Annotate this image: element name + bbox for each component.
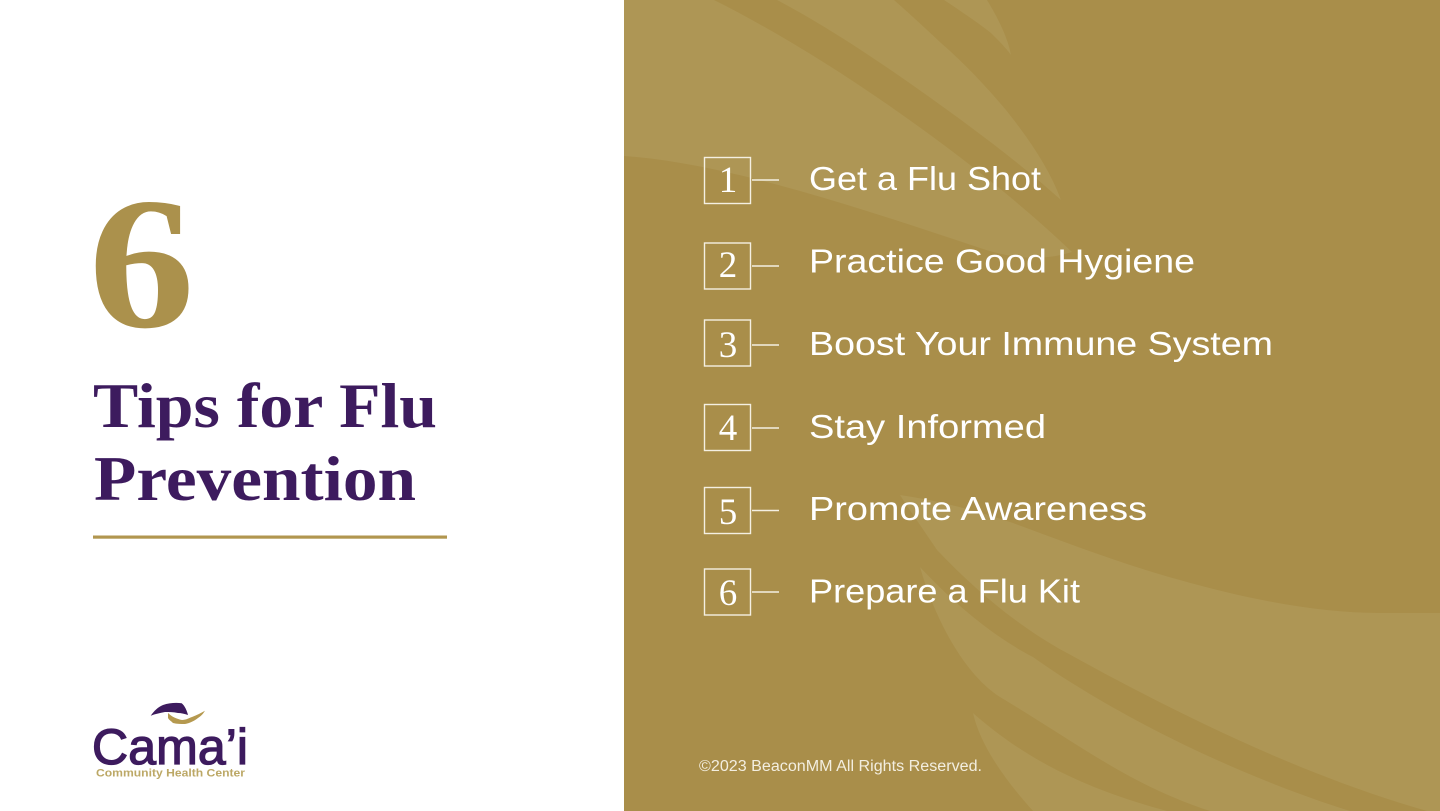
tip 4: 4 [719,408,737,449]
tip 5: 5 [719,492,737,533]
tip 4: Stay Informed [809,408,1046,445]
copyright footer: ©2023 BeaconMM All Rights Reserved. [699,758,982,775]
title: Prevention [94,443,416,514]
big number 6: 6 [88,160,195,368]
tip 3: Boost Your Immune System [809,325,1273,362]
logo: Cama'i Community Health Center [92,703,248,780]
tip 1: 1 [719,160,737,201]
tip 3 [704,320,1273,366]
tip 4 [704,404,1046,450]
panel: white left background [0,0,624,811]
icon: gold swoosh [168,711,205,724]
tip 2: 2 [719,245,737,286]
logo tagline: Community Health Center [96,768,246,780]
icon: purple swoosh [151,703,188,716]
tip 6 [704,569,1080,615]
panel: gold right background [624,0,1440,811]
logo wordmark: Cama’i [92,719,248,775]
tip 6: 6 [719,573,737,614]
title [93,370,437,514]
title: Tips for Flu [93,370,437,441]
tip 6: Prepare a Flu Kit [809,572,1080,610]
tip 3: 3 [719,325,737,366]
tip 2 [704,242,1195,289]
tip 1: Get a Flu Shot [809,160,1041,197]
tip 5 [704,488,1147,534]
tip 2: Practice Good Hygiene [809,242,1195,280]
tip 1 [704,158,1041,204]
title underline [93,536,447,539]
tip 5: Promote Awareness [809,490,1147,527]
